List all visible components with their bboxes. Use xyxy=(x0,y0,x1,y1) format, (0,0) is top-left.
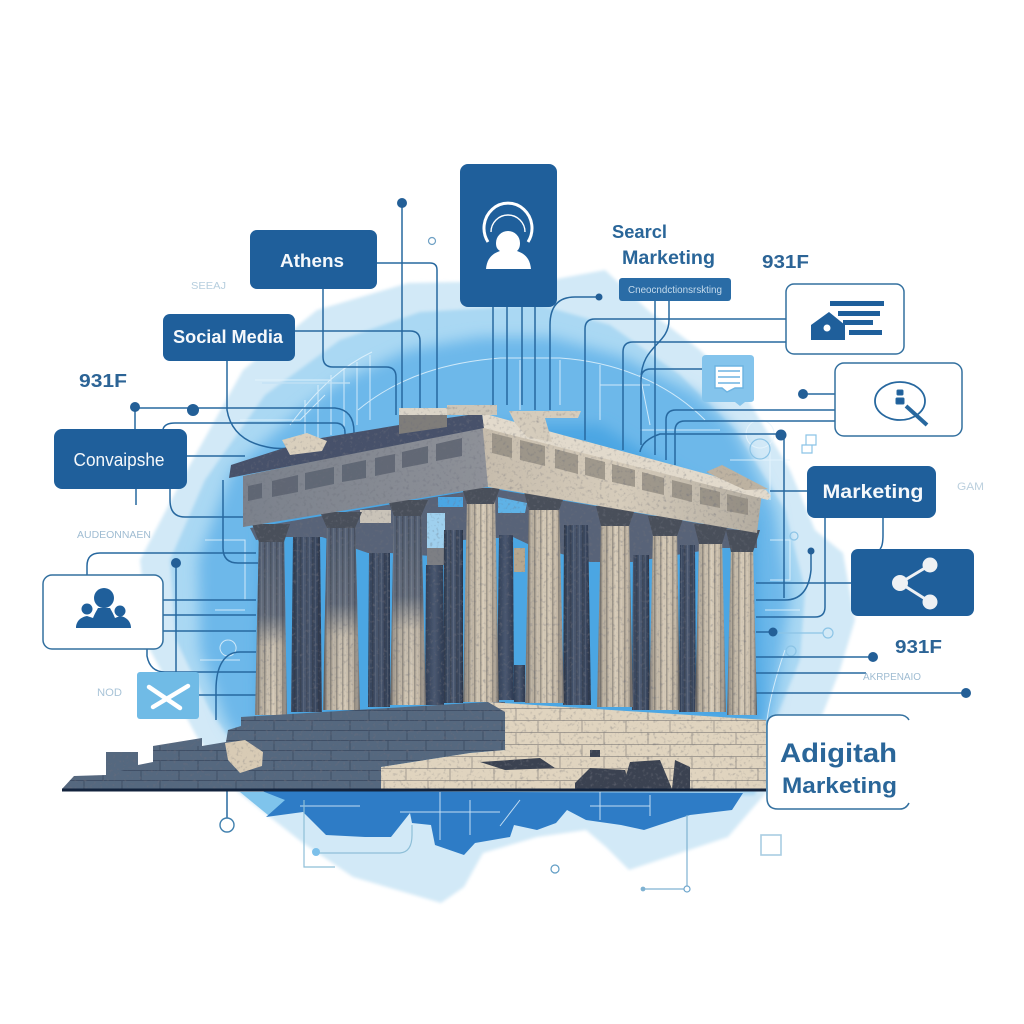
left cornice xyxy=(229,413,484,478)
icon: magnifying glass xyxy=(875,382,927,425)
pale blue under temple left xyxy=(240,792,310,815)
icon: people group xyxy=(76,588,131,628)
right cornice xyxy=(482,413,771,500)
entablature left face xyxy=(243,425,488,527)
box: Adigitah Marketing xyxy=(767,715,909,809)
box: Social Media: Social Media xyxy=(173,327,284,347)
box: Marketing: Marketing xyxy=(822,482,924,503)
base shadows xyxy=(480,750,690,789)
box: Athens xyxy=(250,230,377,289)
tile: share xyxy=(851,549,974,616)
label: 931F left: 931F xyxy=(79,371,127,391)
box: Convaipshe: Convaipshe xyxy=(74,450,164,470)
box: Athens: Athens xyxy=(280,251,344,271)
heading: Search Marketing xyxy=(612,222,715,269)
label: faint lower right: AKRPENAIO xyxy=(863,672,921,683)
roof blocks xyxy=(399,413,447,434)
label: GAM: GAM xyxy=(957,481,984,493)
box: Convaipshe xyxy=(54,429,187,489)
box: Adigitah Marketing: Marketing xyxy=(782,773,897,798)
box: Social Media xyxy=(163,314,295,361)
lines to left boxes xyxy=(87,553,256,575)
watercolor backdrop xyxy=(140,270,855,903)
ground line xyxy=(62,788,766,792)
pediment ends xyxy=(282,433,327,455)
minor backdrop nodes xyxy=(262,238,833,656)
box: Marketing xyxy=(807,466,936,518)
label: faint audience: AUDEONNAEN xyxy=(77,529,151,541)
capitals xyxy=(252,488,760,552)
lines from search marketing strip xyxy=(654,301,656,455)
icon: message lines xyxy=(715,366,743,392)
windows through the colonnade xyxy=(438,497,463,507)
reflection under temple xyxy=(262,791,743,855)
box: audience xyxy=(43,575,163,649)
inner beam behind columns xyxy=(250,488,757,562)
column flutes xyxy=(255,495,757,715)
icon: share nodes xyxy=(892,558,937,609)
box: Adigitah Marketing: Adigitah xyxy=(780,738,897,768)
heading: Search Marketing: Searcl xyxy=(612,222,667,242)
heading: Search Marketing: Marketing xyxy=(622,248,715,269)
lines from Athens and top dot xyxy=(377,263,437,410)
dark inner columns xyxy=(291,525,696,712)
temple base xyxy=(62,702,766,789)
lines to right boxes xyxy=(585,319,786,440)
temple xyxy=(62,405,771,789)
box: house and text lines xyxy=(786,284,904,354)
fine circuit lines on backdrop xyxy=(200,352,800,840)
connector lines xyxy=(87,203,966,818)
lines from portrait tile xyxy=(493,307,535,410)
column shading xyxy=(255,507,426,715)
tile: chat xyxy=(702,355,754,406)
stone fragment in gap xyxy=(514,548,525,572)
icon: crossed arrows xyxy=(149,686,188,708)
label: 931F top right: 931F xyxy=(762,252,809,272)
tile: crossed tools xyxy=(137,672,199,719)
connector end dots xyxy=(130,198,971,698)
icon: person with halo xyxy=(484,203,532,269)
strip: small blue caption: Cneocndctionsrskting xyxy=(628,285,722,296)
strip: small blue caption xyxy=(619,278,731,301)
icon: house with lines xyxy=(811,301,884,340)
label: NOD: NOD xyxy=(97,687,122,699)
tile: profile xyxy=(460,164,557,307)
left metopes xyxy=(248,438,462,501)
bottom decorative nodes xyxy=(220,800,781,892)
label: 931F lower right: 931F xyxy=(895,637,942,657)
entablature right face xyxy=(482,420,762,533)
label: faint left top: SEEAJ xyxy=(191,281,226,292)
right metopes xyxy=(492,433,748,515)
box: magnifier xyxy=(835,363,962,436)
front columns xyxy=(255,495,757,715)
